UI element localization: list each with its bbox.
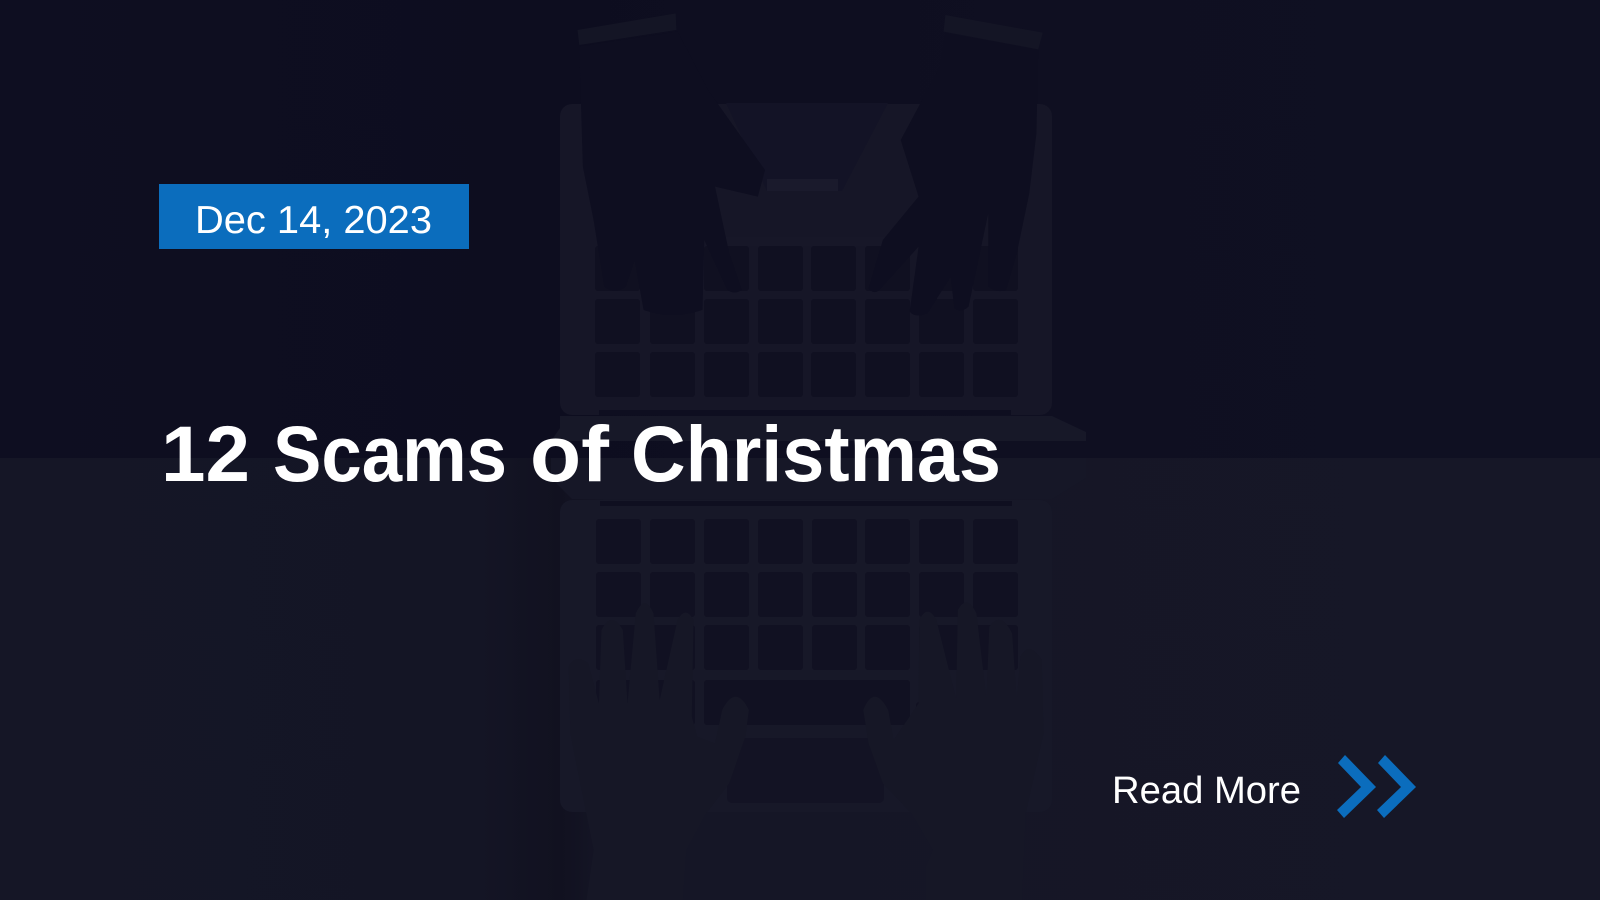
background: top dark desk [0, 0, 1600, 458]
title: 12 [161, 409, 250, 498]
top hands reflection [577, 13, 1043, 315]
background: bottom lighter desk [0, 458, 1600, 900]
icon: double chevron arrow [1337, 755, 1416, 818]
title: Scams [273, 409, 507, 498]
date badge [159, 184, 469, 249]
date badge: Dec 14, 2023 [195, 199, 432, 242]
title [161, 409, 1001, 498]
top laptop image [551, 103, 1086, 441]
title: of [530, 409, 610, 498]
bottom hands [569, 602, 1044, 900]
read more label: Read More [1112, 770, 1301, 812]
bottom laptop image [551, 458, 1086, 812]
title: Christmas [631, 409, 1001, 498]
